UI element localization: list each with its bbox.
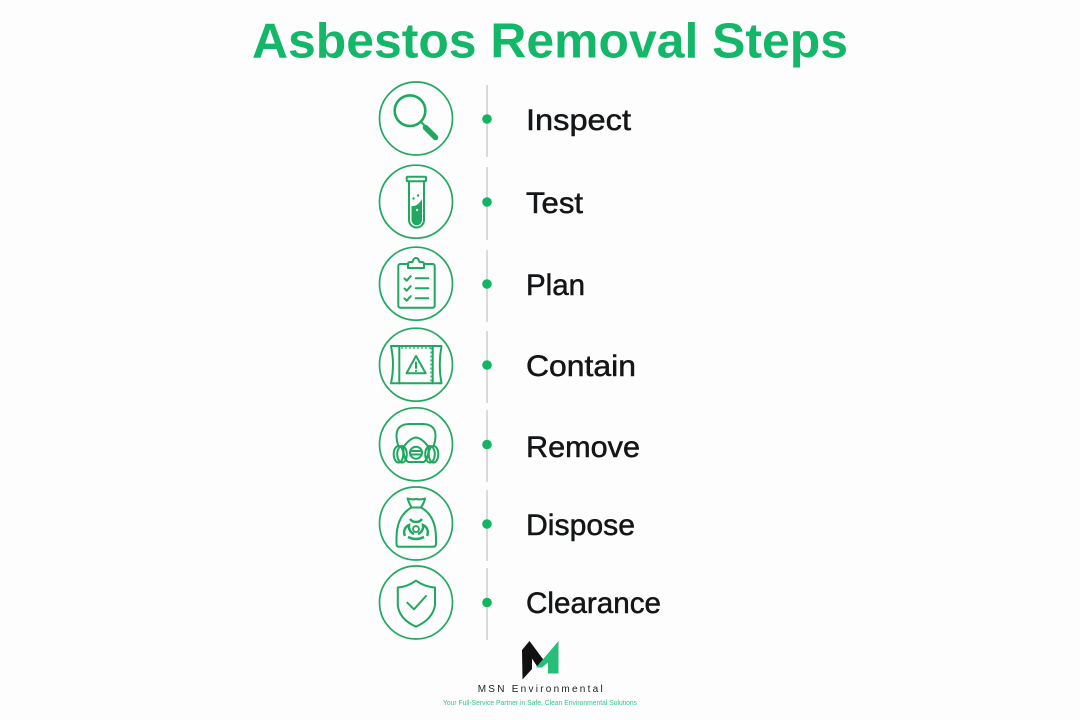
step: Clearance — [380, 566, 661, 640]
logo: MSN Environmental — [443, 641, 637, 707]
timeline marker — [482, 410, 492, 482]
step: Dispose — [380, 487, 635, 561]
icon: respirator mask — [380, 408, 452, 481]
timeline marker — [482, 167, 492, 240]
timeline marker — [482, 250, 492, 322]
title: Asbestos Removal Steps — [252, 14, 848, 68]
step: Test — [380, 165, 584, 240]
label: Inspect — [526, 104, 632, 137]
label: Dispose — [526, 509, 635, 542]
company name: MSN Environmental — [478, 684, 603, 695]
label: Contain — [526, 350, 636, 383]
logo mark — [522, 641, 558, 680]
timeline marker — [482, 85, 492, 157]
timeline marker — [482, 331, 492, 403]
label: Clearance — [526, 587, 661, 620]
timeline marker — [482, 490, 492, 561]
label: Remove — [526, 431, 640, 464]
icon: test tube — [380, 165, 452, 238]
icon: shield with check — [380, 566, 452, 639]
label: Test — [526, 187, 584, 220]
step: Contain — [380, 328, 636, 403]
icon: biohazard waste bag — [380, 487, 452, 560]
step: Inspect — [380, 82, 632, 157]
step: Plan — [380, 247, 585, 322]
icon: magnifying glass — [380, 82, 452, 155]
timeline marker — [482, 568, 492, 640]
label: Plan — [526, 269, 585, 302]
icon: clipboard checklist — [380, 247, 452, 320]
icon: containment bag with warning — [380, 328, 452, 401]
step: Remove — [380, 408, 640, 482]
tagline: Your Full-Service Partner in Safe, Clean Environmental Solutions — [443, 700, 637, 707]
